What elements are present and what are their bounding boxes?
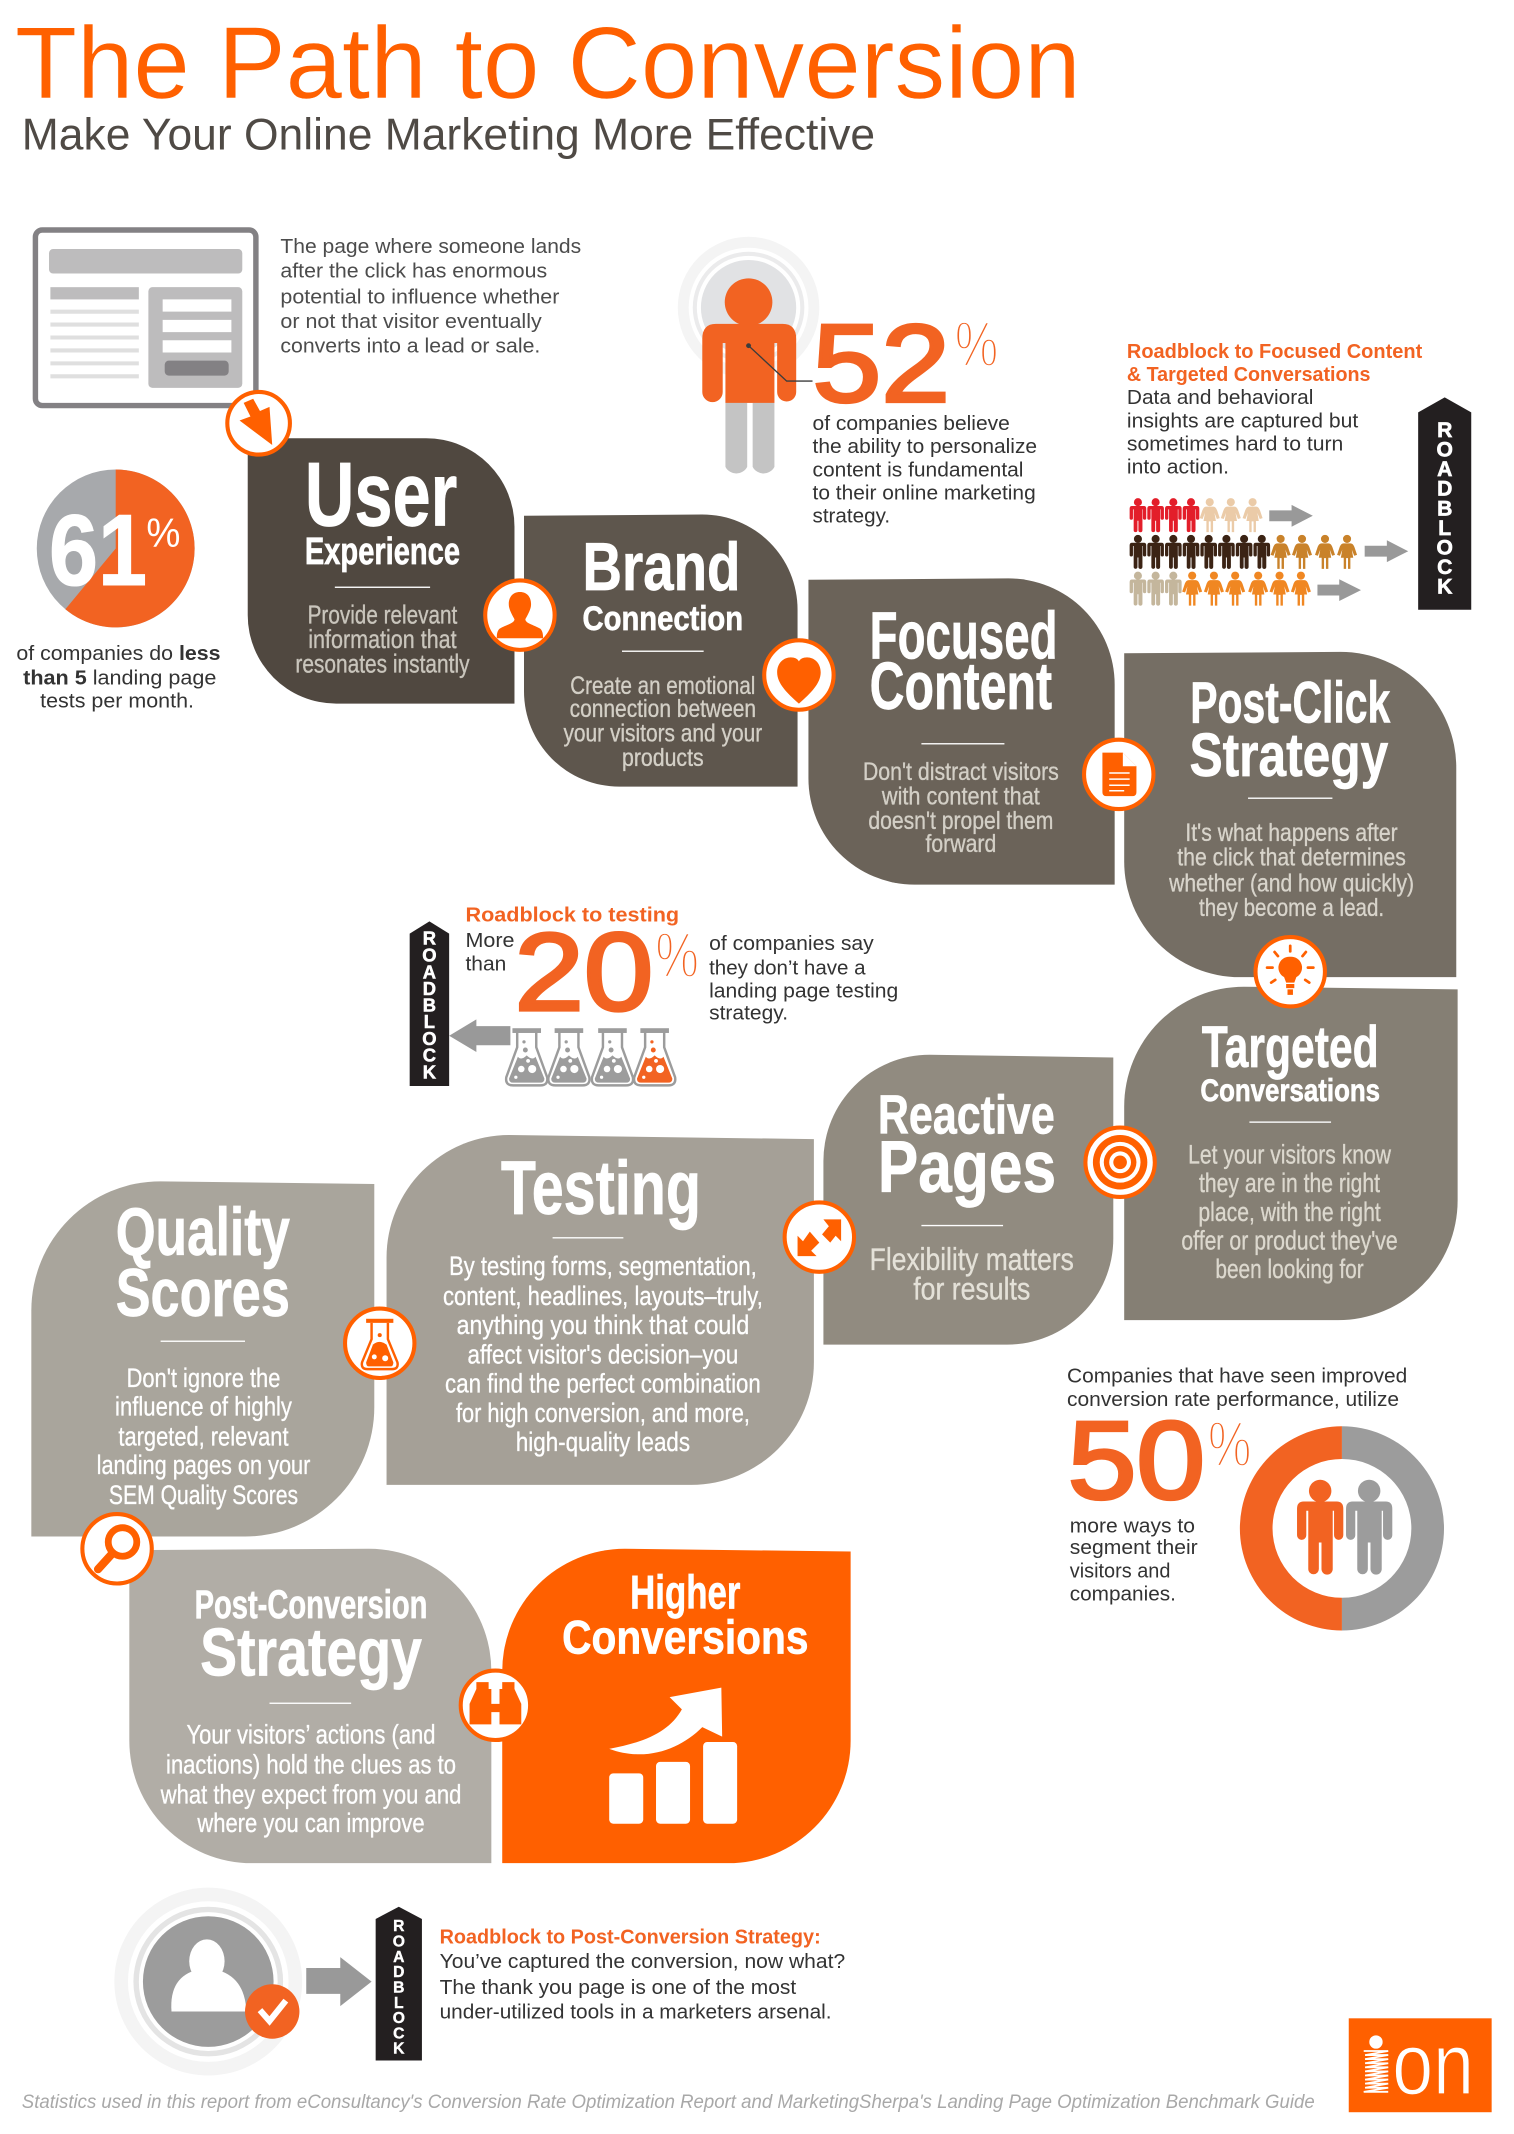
panel: testing: By testing forms, segmentation, xyxy=(449,1250,757,1281)
panel: post-conversion strategy: Strategy xyxy=(200,1614,422,1690)
panel: user experience: resonates instantly xyxy=(295,650,470,678)
pie caption xyxy=(16,643,221,713)
panel: post-click strategy: the click that determines xyxy=(1177,844,1406,872)
panel: user experience: information that xyxy=(308,626,457,654)
pie chart: 61% xyxy=(37,470,195,627)
subtitle: Make Your Online Marketing More Effective xyxy=(22,109,875,160)
stat 50 text: segment their xyxy=(1070,1537,1198,1559)
panel: testing xyxy=(387,1135,814,1485)
panel: post-click strategy xyxy=(1124,652,1456,977)
icon: binoculars badge xyxy=(461,1671,530,1740)
roadblock testing text: than xyxy=(465,953,506,975)
panel: reactive pages: Reactive xyxy=(878,1085,1055,1146)
panel: quality scores: landing pages on your xyxy=(97,1449,310,1480)
panel: post-conversion strategy xyxy=(129,1549,491,1863)
roadblock text: post-conversion: Roadblock to Post-Conversion Strategy: xyxy=(440,1926,821,1948)
panel: targeted conversations: place, with the right xyxy=(1198,1196,1381,1227)
roadblock text: focused content: insights are captured but xyxy=(1127,410,1359,432)
panel: post-conversion strategy: Post-Conversion xyxy=(195,1583,427,1627)
panel: post-conversion strategy: inactions) hold the clues as to xyxy=(166,1748,456,1779)
roadblock text: focused content: into action. xyxy=(1127,457,1229,479)
panel: brand connection: Connection xyxy=(583,600,743,638)
panel: quality scores: targeted, relevant xyxy=(118,1420,289,1451)
panel: quality scores: influence of highly xyxy=(115,1390,292,1421)
stat 50 heading text: conversion rate performance, utilize xyxy=(1067,1389,1399,1411)
icon: document badge xyxy=(1084,740,1153,809)
stat 52 text: strategy. xyxy=(813,506,890,528)
stat 50 heading text xyxy=(1067,1366,1407,1411)
icon: magnifier badge xyxy=(82,1514,152,1583)
panel: testing: Testing xyxy=(501,1146,701,1231)
icon: converted visitor halo xyxy=(114,1888,302,2075)
intro text: or not that visitor eventually xyxy=(280,311,543,333)
stat 20 text: landing page testing xyxy=(709,981,898,1003)
panel: post-click strategy: Post-Click xyxy=(1190,671,1391,736)
stat: 20% xyxy=(514,911,699,1034)
panel: post-click strategy: It's what happens after xyxy=(1185,819,1398,847)
roadblock testing text: Roadblock to testing xyxy=(465,904,679,926)
stat 50 heading text: Companies that have seen improved xyxy=(1067,1366,1407,1388)
icon: rising bar chart xyxy=(609,1688,737,1824)
stat 50 text: visitors and xyxy=(1070,1560,1170,1582)
panel: brand connection: products xyxy=(622,744,704,772)
stat: 20%: 20 xyxy=(514,911,653,1034)
panel: testing: can find the perfect combination xyxy=(445,1367,761,1398)
panel: quality scores: Quality xyxy=(116,1194,290,1270)
stat: 52%: 52 xyxy=(813,302,950,425)
panel: reactive pages: Pages xyxy=(878,1125,1056,1208)
panel: focused content: doesn't propel them xyxy=(868,807,1053,835)
stat 20 text xyxy=(709,933,898,1024)
roadblock text: focused content: sometimes hard to turn xyxy=(1127,433,1343,455)
icon: person badge xyxy=(485,580,555,650)
logo: ion: on xyxy=(1392,2016,1474,2113)
donut chart with people xyxy=(1240,1426,1444,1630)
stat 50 text: more ways to xyxy=(1070,1515,1195,1537)
panel: testing: high-quality leads xyxy=(516,1426,690,1457)
people rows xyxy=(1130,498,1357,606)
stat 52 text: to their online marketing xyxy=(813,482,1036,504)
pie chart: 61%: % xyxy=(146,510,180,556)
stat 20 text: they don’t have a xyxy=(709,957,866,979)
stat 52 text xyxy=(813,413,1037,528)
arrow right to roadblock xyxy=(306,1957,372,2006)
panel: brand connection xyxy=(524,514,798,787)
panel: reactive pages xyxy=(823,1055,1113,1345)
stat: 50% xyxy=(1068,1399,1251,1522)
panel: focused content: Focused xyxy=(870,600,1058,674)
icon: flasks xyxy=(506,1028,675,1085)
stat 20 text: strategy. xyxy=(709,1002,788,1024)
stat: 20%: % xyxy=(655,919,699,991)
pie chart: 61%: 61 xyxy=(49,495,147,607)
arrows to roadblock xyxy=(1269,505,1408,601)
panel: quality scores: Scores xyxy=(116,1255,290,1331)
roadblock testing text xyxy=(465,904,679,975)
icon: heart badge xyxy=(764,640,834,710)
panel: targeted conversations xyxy=(1124,987,1458,1320)
panel: higher conversions: Higher xyxy=(630,1567,740,1620)
panel: higher conversions xyxy=(502,1549,851,1863)
icon: landing page wireframe xyxy=(35,230,256,406)
panel: testing: anything you think that could xyxy=(457,1309,749,1340)
stat 50 text: companies. xyxy=(1070,1584,1176,1606)
roadblock text: focused content xyxy=(1127,341,1422,479)
pie caption: than 5 landing page xyxy=(23,668,216,690)
roadblock text: post-conversion xyxy=(440,1926,845,2023)
panel: focused content: with content that xyxy=(881,782,1040,810)
panel: brand connection: Brand xyxy=(583,529,740,605)
panel: focused content: forward xyxy=(925,830,996,858)
stat 20 text: of companies say xyxy=(709,933,875,955)
figure: person with halo xyxy=(678,237,819,473)
stat 50 text xyxy=(1070,1515,1198,1606)
roadblock sign: ROADBLOCK xyxy=(1436,419,1453,599)
panel: quality scores xyxy=(31,1181,374,1537)
intro text: potential to influence whether xyxy=(280,286,560,308)
roadblock sign: testing: ROADBLOCK xyxy=(422,928,437,1082)
intro text: converts into a lead or sale. xyxy=(280,335,540,357)
panel: post-click strategy: they become a lead. xyxy=(1199,894,1384,922)
panel: post-conversion strategy: where you can improve xyxy=(197,1807,425,1838)
panel: brand connection: your visitors and your xyxy=(563,720,762,748)
roadblock sign: post-conversion: ROADBLOCK xyxy=(393,1918,405,2058)
roadblock text: post-conversion: under-utilized tools in a marketers arsenal. xyxy=(440,2001,832,2023)
panel: targeted conversations: Let your visitors know xyxy=(1188,1139,1391,1170)
pie caption: of companies do less xyxy=(16,643,221,665)
stat 52 text: the ability to personalize xyxy=(813,436,1037,458)
panel: targeted conversations: Targeted xyxy=(1202,1015,1379,1080)
roadblock testing text: More xyxy=(465,930,514,952)
icon: flask badge xyxy=(345,1309,414,1378)
panel: post-conversion strategy: Your visitors’ actions (and xyxy=(186,1718,436,1749)
panel: quality scores: SEM Quality Scores xyxy=(109,1479,298,1510)
panel: focused content xyxy=(808,578,1115,885)
roadblock sign: testing xyxy=(410,921,449,1086)
panel: targeted conversations: Conversations xyxy=(1200,1073,1380,1108)
icon: lightbulb badge xyxy=(1256,937,1325,1006)
panel: post-conversion strategy: what they expect from you and xyxy=(160,1778,461,1809)
panel: reactive pages: for results xyxy=(913,1272,1030,1307)
panel: brand connection: connection between xyxy=(570,695,756,723)
stat: 52% xyxy=(813,302,998,425)
panel: user experience: Provide relevant xyxy=(308,601,457,629)
panel: testing: for high conversion, and more, xyxy=(456,1397,750,1428)
roadblock sign xyxy=(1418,397,1471,610)
panel: brand connection: Create an emotional xyxy=(570,672,755,700)
roadblock sign: post-conversion xyxy=(376,1907,422,2061)
intro text: The page where someone lands xyxy=(280,236,581,258)
roadblock text: focused content: Data and behavioral xyxy=(1127,387,1313,409)
intro text: after the click has enormous xyxy=(280,261,547,283)
panel: user experience: User xyxy=(305,443,457,545)
roadblock text: post-conversion: The thank you page is one of the most xyxy=(440,1977,797,1999)
stat: 52%: % xyxy=(955,308,998,380)
roadblock text: post-conversion: You’ve captured the conversion, now what? xyxy=(440,1951,845,1973)
panel: focused content: Don't distract visitors xyxy=(863,758,1059,786)
panel: targeted conversations: offer or product they've xyxy=(1181,1224,1398,1255)
stat: 50%: % xyxy=(1208,1408,1251,1480)
stat 52 text: of companies believe xyxy=(813,413,1010,435)
pie caption: tests per month. xyxy=(40,691,194,713)
panel: post-click strategy: whether (and how quickly) xyxy=(1168,869,1414,897)
panel: targeted conversations: they are in the right xyxy=(1199,1167,1380,1198)
panel: testing: content, headlines, layouts–truly, xyxy=(443,1280,763,1311)
icon: arrow badge xyxy=(227,392,290,455)
intro text xyxy=(280,236,581,357)
panel: focused content: Content xyxy=(870,650,1052,724)
panel: higher conversions: Conversions xyxy=(562,1612,808,1665)
panel: targeted conversations: been looking for xyxy=(1215,1253,1364,1284)
stat 52 text: content is fundamental xyxy=(813,459,1023,481)
stat: 50%: 50 xyxy=(1068,1399,1205,1522)
panel: post-click strategy: Strategy xyxy=(1190,721,1388,789)
footer source note: Statistics used in this report from eConsultancy's Conversion Rate Optimization Report and MarketingSherpa's Landing Page Optimization Benchmark Guide xyxy=(22,2092,1315,2113)
panel: reactive pages: Flexibility matters xyxy=(870,1242,1074,1277)
panel: testing: affect visitor's decision–you xyxy=(468,1339,738,1370)
arrow left to roadblock xyxy=(449,1019,510,1052)
logo: ion xyxy=(1349,2016,1492,2113)
panel: user experience xyxy=(248,438,514,704)
title: The Path to Conversion xyxy=(15,6,1081,120)
icon: arrows badge xyxy=(785,1202,854,1272)
panel: quality scores: Don't ignore the xyxy=(127,1362,280,1393)
icon: target badge xyxy=(1085,1128,1155,1197)
roadblock text: focused content: & Targeted Conversations xyxy=(1127,364,1371,386)
panel: user experience: Experience xyxy=(305,531,460,573)
roadblock text: focused content: Roadblock to Focused Content xyxy=(1127,341,1422,363)
